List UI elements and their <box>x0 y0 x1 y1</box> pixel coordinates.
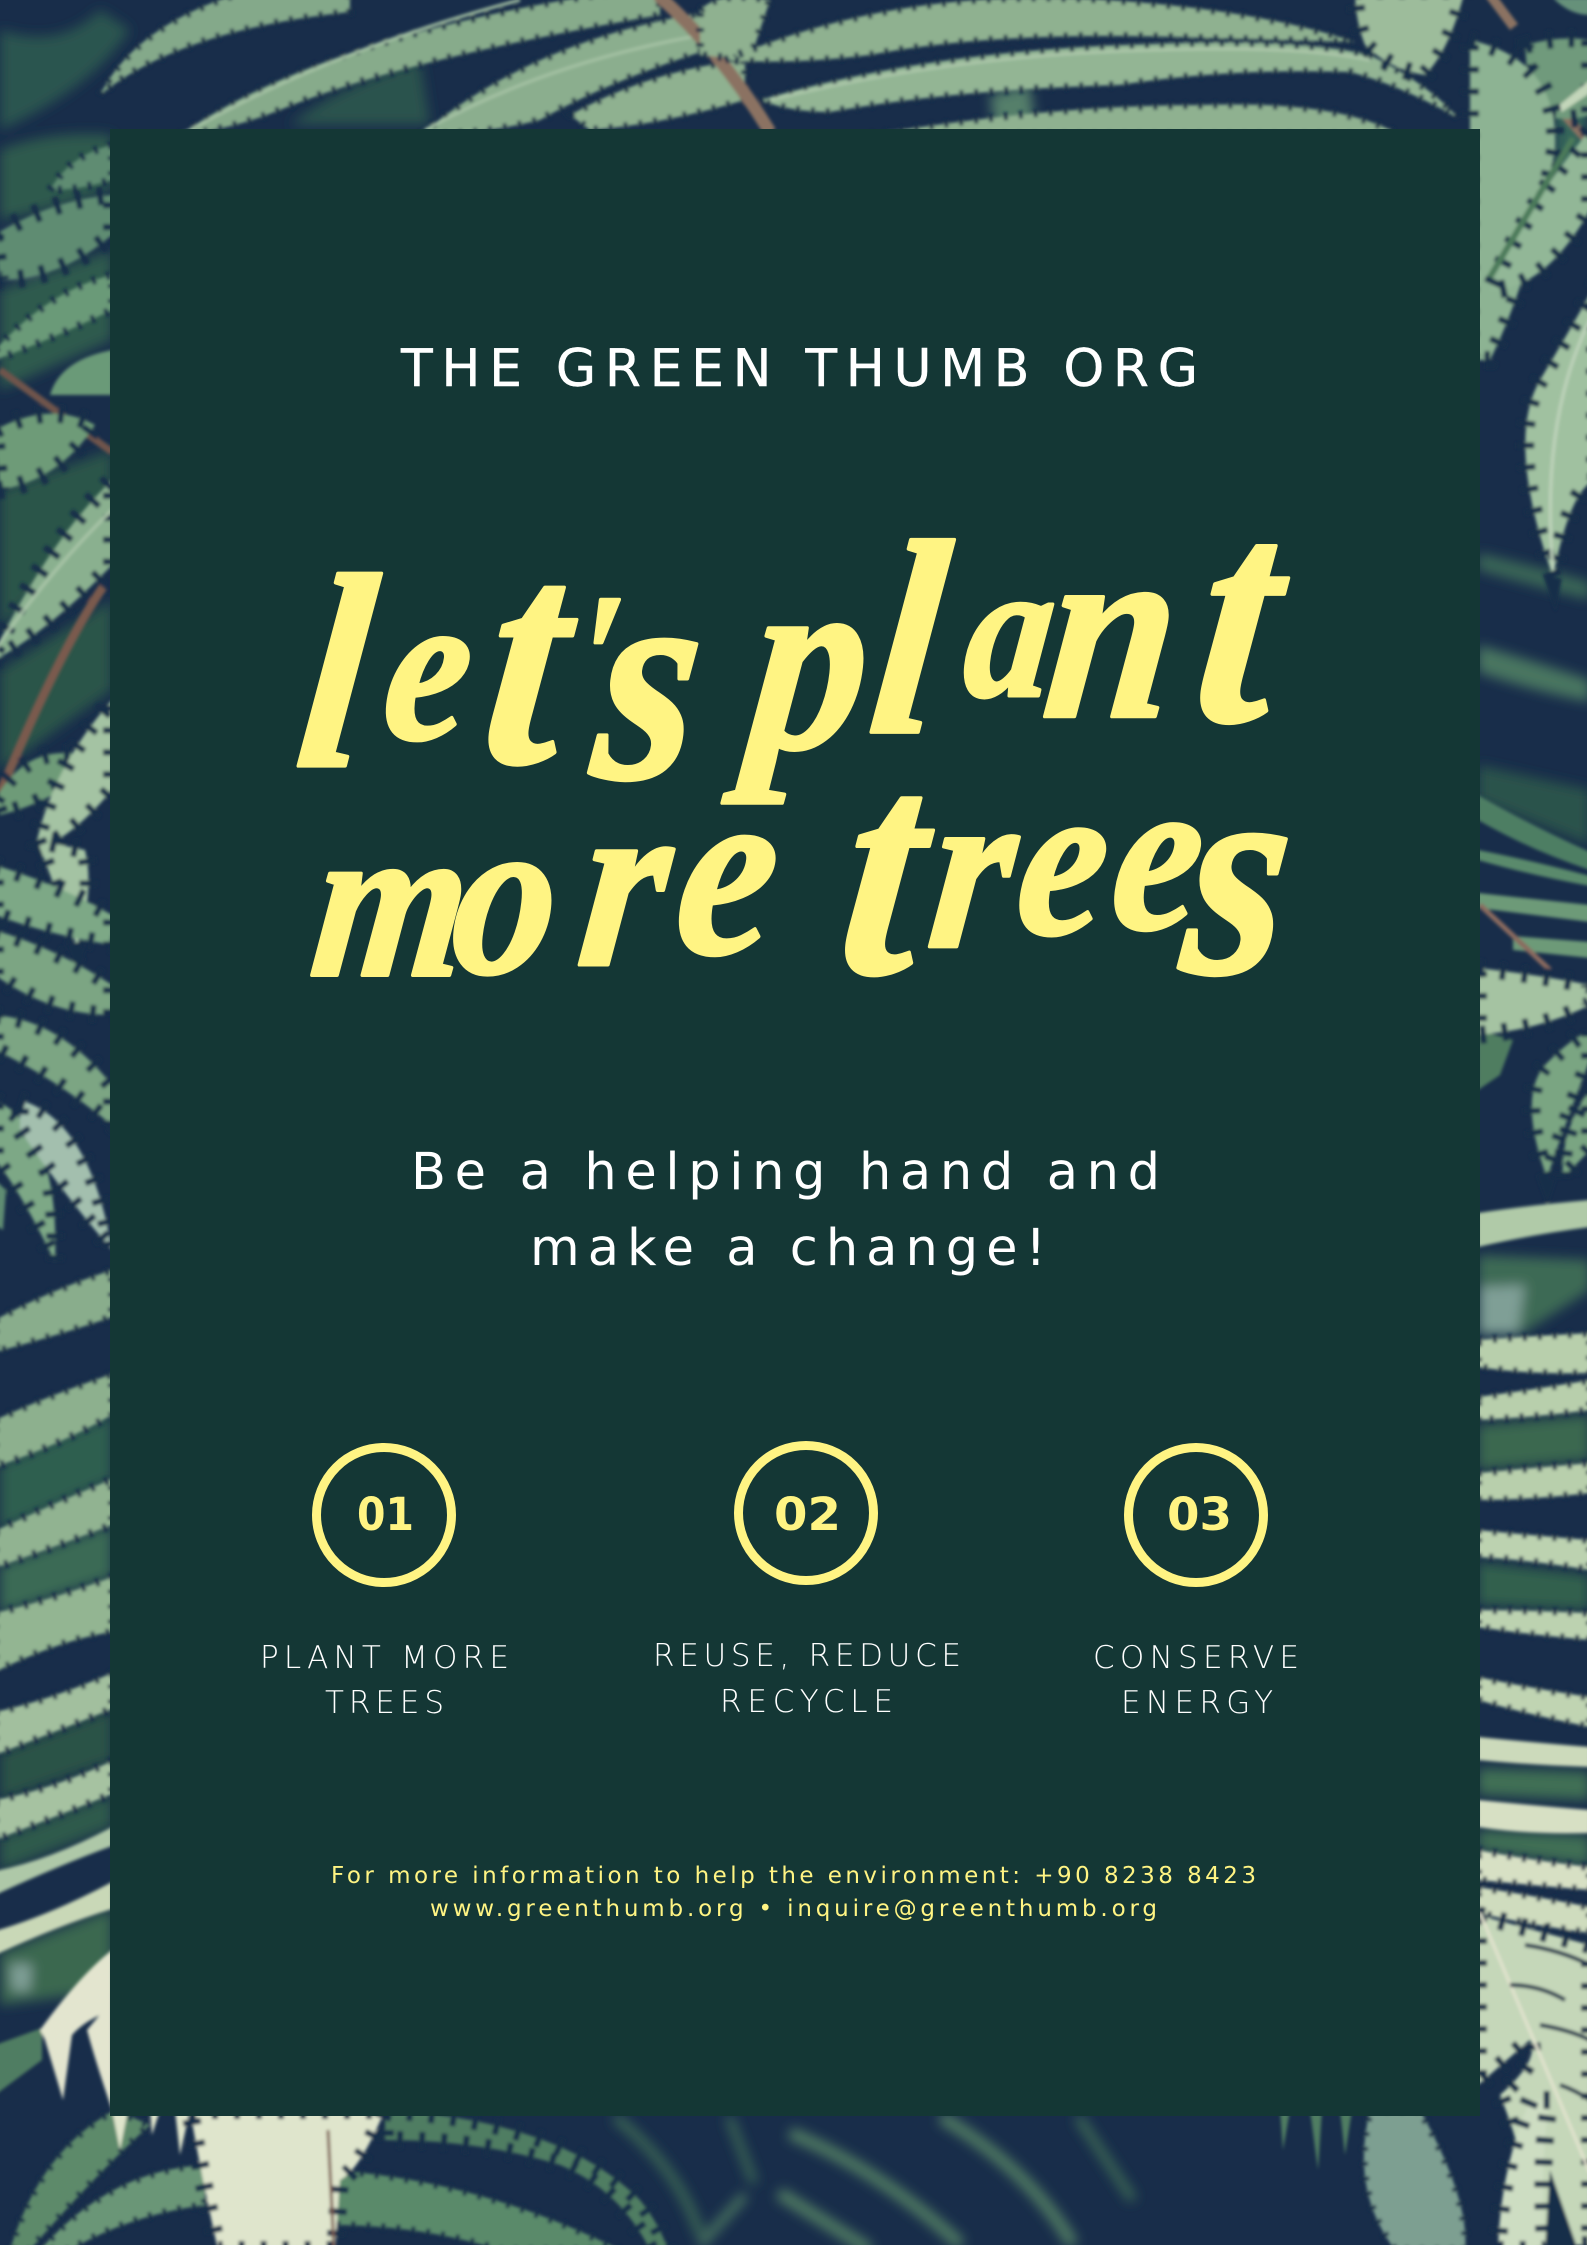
icon: numbered circle 02 <box>738 1446 874 1580</box>
label: plant more trees <box>260 1640 509 1721</box>
title line 2: t <box>828 698 950 1040</box>
title line 2: e <box>1008 737 1121 982</box>
title line 1: ' <box>560 557 627 759</box>
label: plant more trees: TREES <box>325 1685 444 1721</box>
tagline: make a change! <box>530 1219 1046 1278</box>
title line 2: e <box>1103 732 1216 977</box>
footer: contact information: For more information to help the environment: +90 8238 8423 <box>331 1863 1256 1889</box>
icon: numbered circle 03 <box>1128 1448 1264 1582</box>
icon: numbered circle 01: 01 <box>357 1488 414 1541</box>
tagline <box>411 1143 1160 1278</box>
title line 2: r <box>920 737 1030 997</box>
label: conserve energy: CONSERVE <box>1093 1640 1299 1676</box>
title line 1: l <box>286 519 389 826</box>
step 2: reuse, reduce, recycle <box>653 1446 961 1720</box>
panel: dark green card <box>110 129 1480 2116</box>
title line 1: t <box>471 487 594 829</box>
tagline: Be a helping hand and <box>411 1143 1160 1202</box>
title line 1: s <box>579 517 783 841</box>
title line 2: r <box>569 745 686 1018</box>
footer: contact information: www.greenthumb.org • inquire@greenthumb.org <box>430 1896 1157 1922</box>
title: let's plant more trees <box>263 446 1337 1040</box>
label: conserve energy <box>1093 1640 1299 1721</box>
label: reuse, reduce, recycle: RECYCLE <box>720 1684 893 1720</box>
label: plant more trees: PLANT MORE <box>260 1640 509 1676</box>
title line 2: s <box>1168 712 1308 1036</box>
fern fronds: right edge <box>1470 0 1587 2245</box>
footer: contact information <box>331 1863 1256 1922</box>
icon: numbered circle 02: 02 <box>774 1488 841 1541</box>
label: conserve energy: ENERGY <box>1121 1685 1273 1721</box>
fern fronds: bottom strip <box>10 2110 1465 2245</box>
title line 2: e <box>666 733 847 1007</box>
step 1: plant more trees <box>260 1448 509 1721</box>
label: reuse, reduce, recycle: REUSE, REDUCE <box>653 1638 961 1674</box>
fern fronds: top strip <box>100 0 1514 135</box>
step 3: conserve energy <box>1093 1448 1299 1721</box>
label: reuse, reduce, recycle <box>653 1638 961 1720</box>
title line 1: a <box>956 521 1066 738</box>
title line 1: p <box>722 517 884 805</box>
title line 2: m <box>303 779 481 1024</box>
title line 1: t <box>1183 446 1306 788</box>
title line 1: l <box>859 485 962 792</box>
icon: numbered circle 01 <box>316 1448 452 1582</box>
title line 1: e <box>375 548 484 785</box>
fern fronds: left edge <box>0 145 112 2110</box>
title line 1: n <box>1034 486 1193 773</box>
title line 2: o <box>442 769 571 1023</box>
icon: numbered circle 03: 03 <box>1167 1488 1232 1541</box>
heading: organisation name: THE GREEN THUMB ORG <box>400 339 1198 399</box>
